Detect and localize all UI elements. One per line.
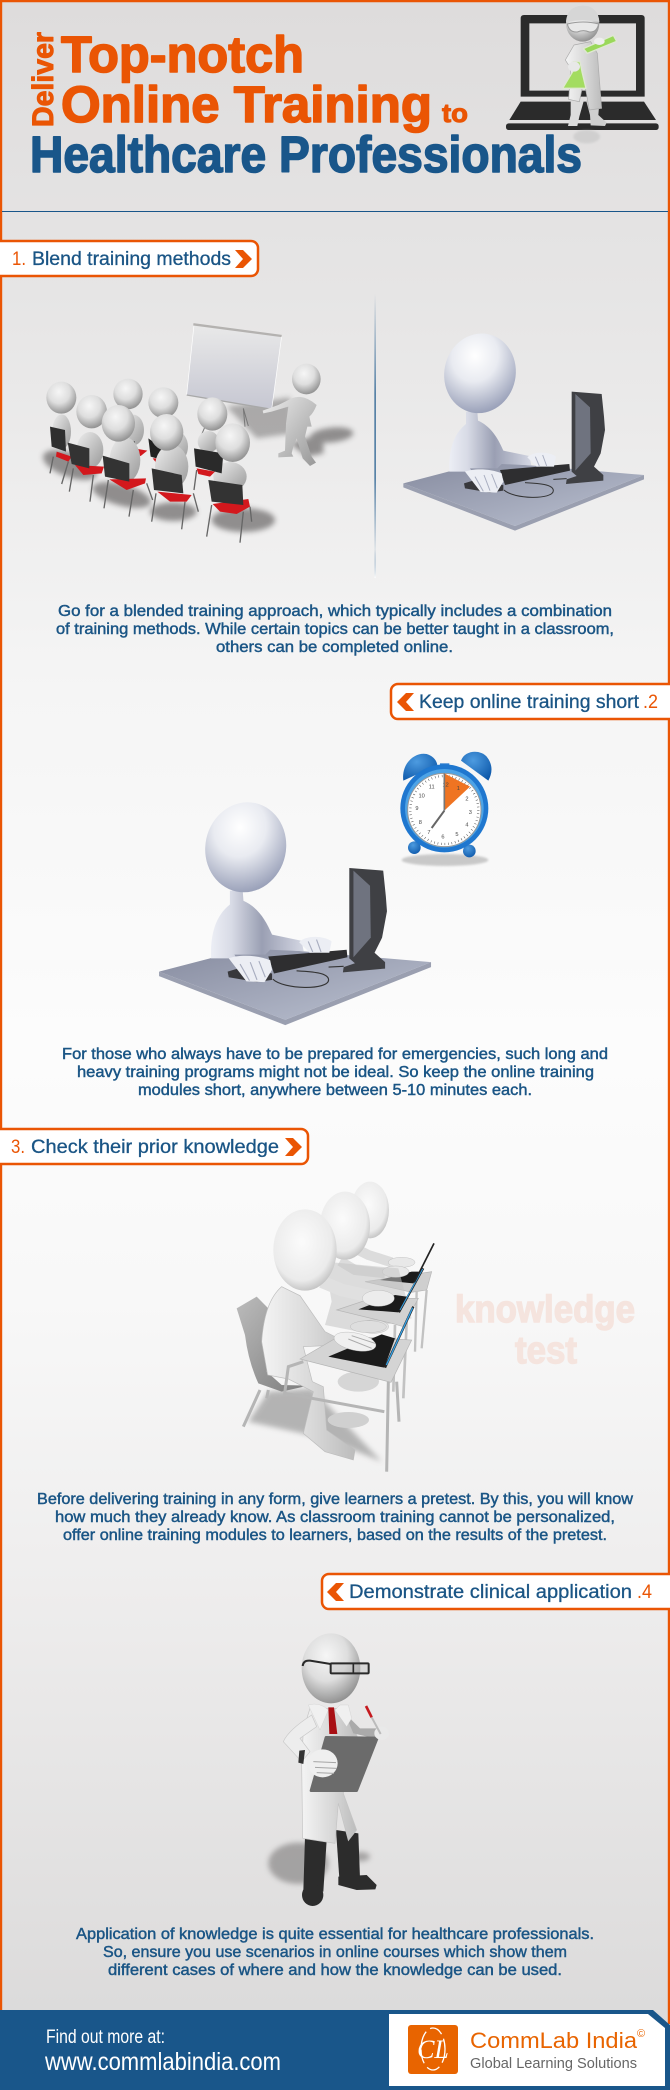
icon: alarm clock: 9	[415, 806, 419, 812]
paragraph 3: how much they already know. As classroom training cannot be personalized,	[55, 1509, 615, 1526]
icon: alarm clock: 4	[465, 823, 469, 829]
floor shadows	[39, 397, 354, 532]
tab box	[0, 241, 258, 276]
tab number: .2	[643, 692, 658, 713]
icon: chevron right	[235, 250, 252, 268]
front chair	[237, 1297, 308, 1427]
front row heads	[46, 382, 250, 462]
icon: alarm clock: 3	[469, 810, 472, 816]
title line: Online Training: Online Training	[61, 76, 432, 133]
right arm	[345, 1713, 377, 1738]
section 2 tab	[391, 684, 670, 719]
logo panel	[389, 2014, 665, 2086]
icon: alarm clock: 2	[465, 797, 469, 803]
glasses	[303, 1661, 369, 1673]
tab number: 1.	[12, 249, 26, 270]
back row students	[113, 379, 188, 463]
flip chart	[187, 324, 282, 437]
footer label: Find out more at:	[46, 2027, 165, 2048]
icon: laptop with scientist	[506, 5, 659, 143]
icon: alarm clock: 12	[443, 783, 449, 789]
wrist band	[298, 1750, 305, 1764]
watermark: knowledge test: test	[515, 1330, 577, 1372]
icon: alarm clock: 8	[419, 820, 422, 826]
logo mark	[408, 2025, 458, 2074]
tab box	[322, 1574, 670, 1609]
trousers and shoes	[302, 1830, 377, 1906]
title line: Top-notch: Top-notch	[61, 26, 304, 83]
paragraph 1	[56, 603, 614, 656]
icon: alarm clock	[400, 752, 492, 866]
pen	[366, 1706, 381, 1734]
paragraph 1: others can be completed online.	[216, 639, 453, 656]
watermark: knowledge test: knowledge	[455, 1289, 635, 1331]
middle learner	[320, 1192, 418, 1428]
icon: chevron right	[285, 1138, 302, 1156]
tab box	[0, 1129, 308, 1164]
logo name: CommLab India	[470, 2028, 638, 2053]
paragraph 2: heavy training programs might not be ideal. So keep the online training	[77, 1064, 594, 1081]
front learner body	[262, 1287, 355, 1460]
section 1 tab	[0, 241, 258, 276]
collar	[308, 1704, 352, 1730]
icon: alarm clock: 5	[455, 832, 459, 838]
chair rows	[50, 414, 252, 543]
scientist figure	[563, 5, 617, 143]
floor shadow	[268, 1843, 370, 1884]
icon: alarm clock: 1	[457, 786, 460, 792]
paragraph 4: Application of knowledge is quite essential for healthcare professionals.	[76, 1926, 594, 1943]
left arm	[283, 1715, 317, 1762]
paragraph 2	[62, 1046, 608, 1099]
icon: alarm clock: 6	[441, 835, 445, 841]
tab heading: Blend training methods	[32, 249, 231, 270]
paragraph 4: different cases of where and how the knowledge can be used.	[108, 1962, 562, 1979]
title word: to: to	[442, 98, 468, 128]
front head	[273, 1209, 337, 1291]
clipboard	[311, 1737, 377, 1791]
paragraph 4: So, ensure you use scenarios in online courses which show them	[103, 1944, 567, 1961]
head	[302, 1633, 360, 1703]
paragraph 1: of training methods. While certain topics can be better taught in a classroom,	[56, 621, 614, 638]
icon: chevron left	[397, 693, 414, 711]
presenter	[263, 364, 321, 466]
paragraph 3: offer online training modules to learners, based on the results of the pretest.	[63, 1527, 607, 1544]
section 4 tab	[322, 1574, 670, 1609]
laptop	[506, 15, 659, 130]
paragraph 3: Before delivering training in any form, give learners a pretest. By this, you will know	[37, 1491, 633, 1508]
tab heading: Check their prior knowledge	[31, 1137, 279, 1158]
illustration: learners at laptops	[237, 1182, 434, 1472]
paragraph 1: Go for a blended training approach, which typically includes a combination	[58, 603, 612, 620]
tab number: .4	[637, 1582, 652, 1603]
icon: chevron left	[327, 1583, 344, 1601]
tab box	[391, 684, 670, 719]
floor shadow	[248, 1388, 382, 1462]
logo mark: CL	[417, 2035, 449, 2064]
footer band	[0, 2010, 670, 2090]
header divider	[2, 211, 668, 212]
illustration: doctor with clipboard	[268, 1633, 389, 1906]
logo tagline: Global Learning Solutions	[470, 2056, 637, 2072]
icon: alarm clock: 11	[429, 784, 435, 790]
front hand	[332, 1329, 378, 1355]
tab number: 3.	[11, 1137, 25, 1158]
icon: alarm clock: 7	[427, 830, 431, 836]
second hand	[350, 1321, 386, 1333]
section 3 tab	[0, 1129, 308, 1164]
vertical divider	[374, 294, 376, 578]
laptop screens	[385, 1243, 434, 1368]
illustration: person at computer, larger	[159, 795, 431, 1025]
paragraph 2: For those who always have to be prepared for emergencies, such long and	[62, 1046, 608, 1063]
illustration: classroom training	[39, 324, 354, 543]
paragraph 2: modules short, anywhere between 5-10 minutes each.	[138, 1082, 532, 1099]
paragraph 4	[76, 1926, 594, 1979]
back learner	[340, 1182, 432, 1352]
footer url: www.commlabindia.com	[44, 2048, 281, 2076]
title line: Healthcare Professionals: Healthcare Professionals	[30, 126, 582, 183]
tie	[328, 1707, 337, 1734]
title word: Deliver: Deliver	[27, 32, 60, 127]
tab heading: Keep online training short	[419, 692, 640, 713]
holding hand	[308, 1749, 338, 1777]
lab coat	[302, 1708, 357, 1843]
paragraph 3	[37, 1491, 633, 1544]
front desk	[284, 1336, 412, 1472]
icon: alarm clock: 10	[419, 793, 425, 799]
pen hand	[374, 1727, 389, 1740]
illustration: person at computer	[403, 327, 644, 531]
watermark: knowledge test	[455, 1289, 635, 1372]
title	[27, 26, 582, 183]
copyright mark: ©	[637, 2028, 645, 2040]
tab heading: Demonstrate clinical application	[349, 1582, 632, 1603]
front laptop	[328, 1334, 395, 1368]
